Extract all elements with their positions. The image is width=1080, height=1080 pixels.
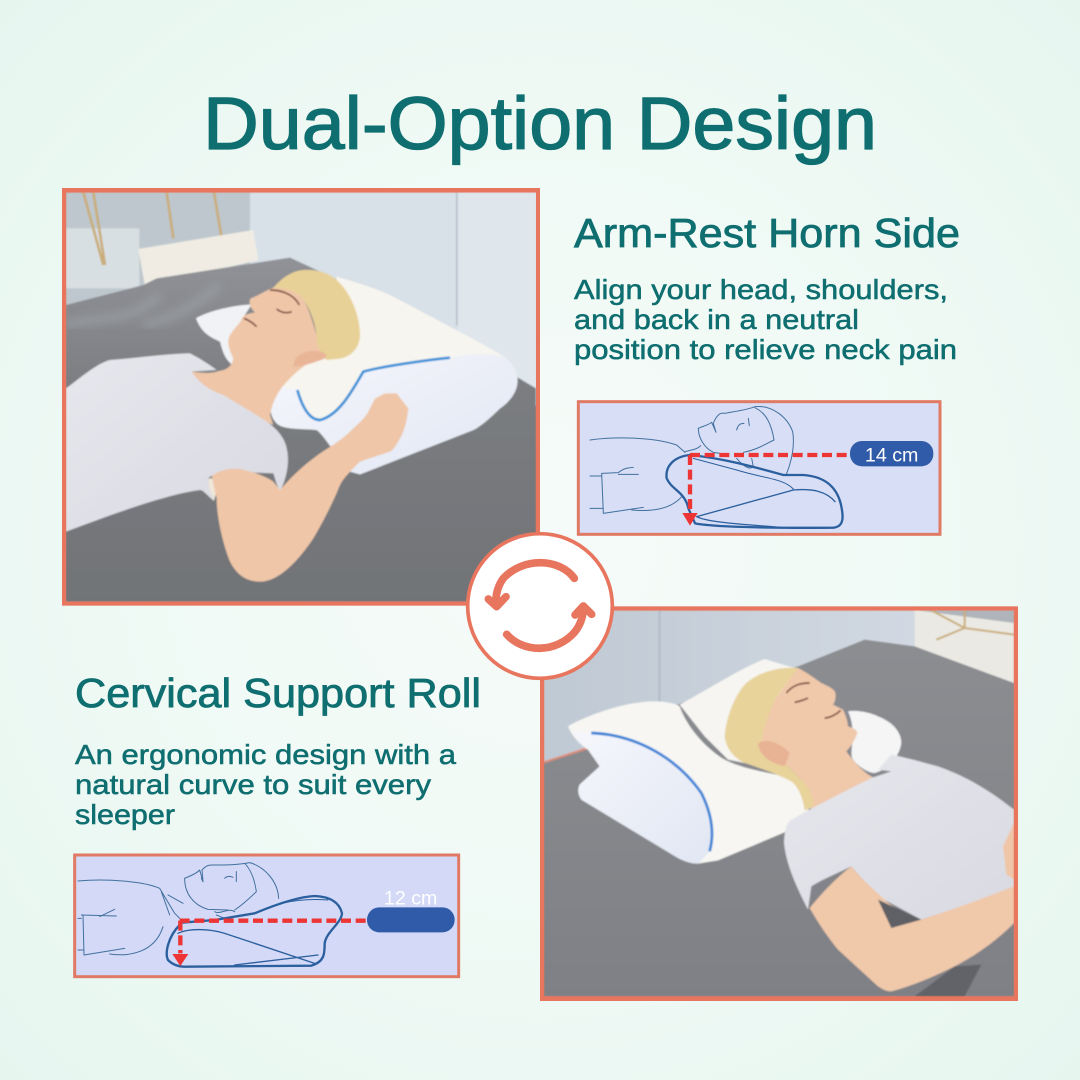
text block: cervical description: An ergonomic design with a (75, 739, 456, 770)
pillow blue piping (297, 358, 450, 420)
left pillow horn (196, 304, 252, 367)
body outline (590, 406, 793, 513)
hair (725, 668, 813, 810)
arm and hand (810, 866, 1014, 991)
chart: 14 cm height diagram (578, 402, 940, 534)
arrow: lower (507, 606, 592, 648)
pillow side face (571, 731, 712, 864)
text block: arm-rest description: and back in a neutral (574, 304, 859, 335)
ear (293, 351, 326, 367)
pillow side face (270, 354, 518, 474)
arm and hand (212, 393, 408, 582)
14 cm label (850, 441, 933, 467)
text block: arm-rest description: position to relieve neck pain (574, 334, 957, 365)
arrow: upper (488, 563, 574, 607)
red measure lines (180, 921, 367, 953)
face and neck (758, 668, 878, 811)
text block: cervical description (75, 739, 456, 830)
title: Dual-Option Design (203, 82, 877, 165)
pillow outline (666, 455, 843, 528)
shirt (784, 755, 1014, 920)
front pillow body (568, 701, 813, 864)
pillow blue piping (591, 733, 712, 851)
text block: cervical description: natural curve to suit every (75, 769, 431, 800)
bed sheet (544, 640, 1014, 996)
face and neck (192, 285, 327, 425)
hair (273, 270, 360, 360)
text block: arm-rest description (574, 274, 957, 365)
bed sheet (66, 258, 536, 602)
red measure lines (690, 455, 850, 515)
heading: arm-rest horn side: Arm-Rest Horn Side (574, 210, 960, 256)
12 cm label: 12 cm (384, 887, 437, 909)
14 cm label: 14 cm (865, 445, 918, 467)
body outline (78, 863, 279, 955)
shirt (66, 353, 288, 532)
heading: cervical support roll: Cervical Support Roll (75, 670, 481, 716)
arrowhead (682, 513, 698, 526)
panel: arm-rest horn side photo (62, 188, 540, 606)
panel: cervical support roll photo (540, 606, 1018, 1001)
right pillow horn (848, 711, 901, 773)
icon: swap arrows badge (468, 534, 612, 678)
12 cm label (367, 887, 455, 932)
pillow outline (167, 896, 342, 967)
chart: 12 cm height diagram (75, 855, 459, 977)
arrowhead (172, 954, 188, 966)
ear (758, 741, 790, 766)
text block: cervical description: sleeper (75, 799, 175, 830)
pillow body (282, 276, 502, 430)
text block: arm-rest description: Align your head, shoulders, (574, 274, 948, 305)
back pillow horn (680, 659, 801, 763)
